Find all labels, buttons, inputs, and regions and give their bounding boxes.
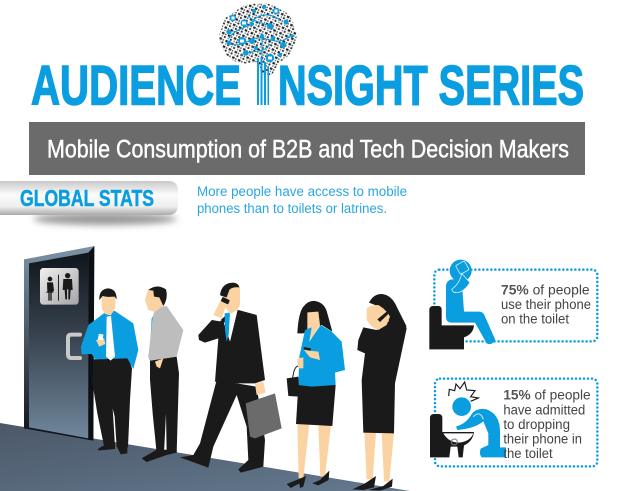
restroom sign	[40, 268, 79, 305]
intro text: More people have access to mobile	[197, 184, 407, 199]
door handle	[68, 335, 80, 358]
stat text: 15% of people	[503, 388, 591, 403]
icon: person dropping phone in toilet	[430, 382, 506, 457]
subtitle banner	[29, 122, 585, 175]
floor	[0, 423, 410, 491]
restroom door	[24, 246, 94, 441]
stat text	[503, 388, 591, 461]
intro text	[197, 184, 407, 216]
stat text: their phone in	[503, 432, 582, 447]
man in grey shirt	[142, 286, 183, 462]
stat panel: 75 percent	[429, 260, 597, 349]
title	[31, 54, 584, 116]
stat text: have admitted	[503, 402, 585, 417]
woman in blue jacket	[287, 301, 345, 488]
intro text: phones than to toilets or latrines.	[197, 201, 387, 216]
stat text	[501, 282, 591, 326]
stat text: use their phone	[501, 297, 591, 312]
brain illustration	[219, 3, 296, 75]
stat text: the toilet	[503, 446, 553, 461]
woman in black on phone	[352, 294, 407, 491]
stat text: 75% of people	[501, 282, 590, 297]
title: AUDIENCE	[31, 54, 241, 116]
handbag	[287, 366, 299, 397]
title letter I drawn as brain stem lines	[257, 58, 269, 105]
stat text: to dropping	[503, 417, 570, 432]
icon: person on toilet	[429, 260, 495, 349]
stat text: on the toilet	[501, 311, 569, 326]
stat panel: 15 percent	[430, 379, 597, 466]
global stats pill: GLOBAL STATS	[20, 185, 154, 211]
man in suit on phone with briefcase	[180, 283, 282, 473]
global stats pill	[0, 181, 178, 225]
briefcase	[246, 393, 282, 438]
man in blue shirt	[81, 288, 138, 454]
